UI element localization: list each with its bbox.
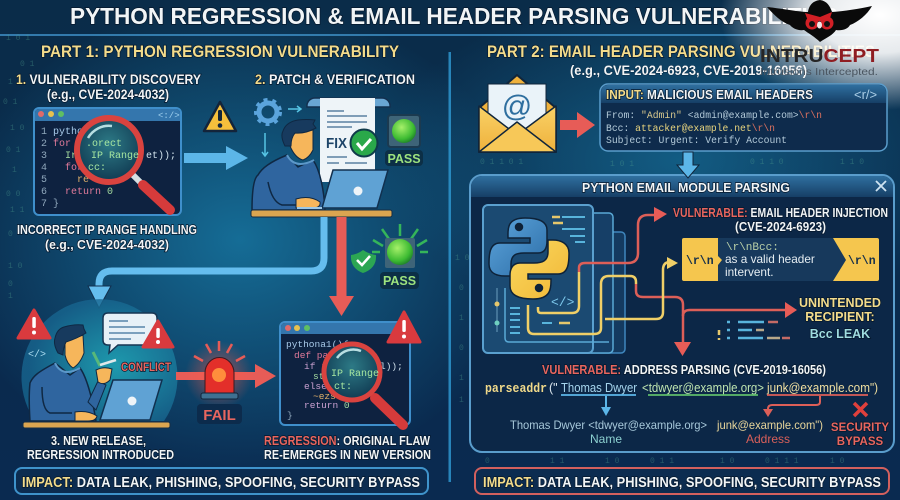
injection payload: [682, 238, 879, 281]
title: PYTHON REGRESSION & EMAIL HEADER PARSING VULNERABILITIES: [70, 3, 838, 29]
caption: incorrect ip range: [17, 223, 197, 252]
step 2 heading: 2. PATCH & VERIFICATION: [255, 72, 415, 87]
code window: discovery: 5 re: [41, 175, 89, 186]
code window: regression: return 0: [304, 400, 350, 411]
unintended recipient: RECIPIENT:: [805, 310, 875, 324]
panel: input headers: <r/>: [854, 87, 877, 102]
code window: regression: pythona1(){: [286, 339, 349, 350]
matrix digits backdrop: 1 0 1: [610, 160, 634, 169]
panel: python email module parsing: [470, 175, 894, 452]
step 1 heading: (e.g., CVE-2024-4032): [47, 87, 169, 102]
matrix digits backdrop: 1 1: [10, 206, 25, 215]
injection payload: as a valid header: [725, 252, 815, 266]
code window: discovery: 3 Ir: [41, 151, 77, 162]
code window: discovery: <:/>: [158, 111, 180, 121]
code window stack: [483, 205, 625, 353]
arrow: to address: [763, 396, 820, 417]
security bypass: BYPASS: [837, 436, 884, 448]
pass light: PASS: [387, 152, 421, 166]
regression caption: RE-EMERGES IN NEW VERSION: [264, 448, 431, 462]
code window: discovery: et));: [146, 150, 176, 162]
parsed name: [510, 418, 707, 446]
code window: discovery: 2 for: [41, 138, 71, 150]
code window: regression: def pat: [294, 350, 334, 361]
address parsing heading: VULNERABLE: ADDRESS PARSING (CVE-2019-16056): [542, 362, 826, 377]
logo: intrucept: Intrusions Intercepted.: [760, 66, 878, 78]
matrix digits backdrop: 1 1: [459, 314, 474, 323]
parseaddr call: <tdwyer@example.org>: [642, 381, 764, 395]
matrix digits backdrop: 0 1 1: [650, 457, 674, 466]
icon: magnifier on code: .orect: [86, 139, 122, 150]
code window: regression: st: [313, 371, 324, 382]
matrix digits backdrop: 0: [459, 284, 464, 293]
parsed address: junk@example.com"): [716, 418, 823, 432]
matrix digits backdrop: 0 1: [3, 98, 18, 107]
laptop: [297, 170, 388, 208]
injection heading: (CVE-2024-6923): [735, 220, 826, 234]
icon: magnifier on regression code: IP Range: [331, 369, 379, 380]
arrow: input to module: [677, 152, 699, 178]
icon: envelope: @: [502, 90, 532, 123]
code window: regression: if r: [304, 361, 327, 372]
code window: discovery: 7 }: [41, 198, 59, 210]
unintended recipient: UNINTENDED: [799, 296, 881, 310]
icon: envelope: [479, 75, 556, 152]
logo backdrop glow: [720, 0, 900, 110]
panel: input headers: Bcc: attacker@example.net\r\n: [606, 123, 775, 135]
icon: magnifier on code: cc:: [88, 163, 106, 174]
parsed address: Address: [746, 432, 790, 446]
matrix digits backdrop: 0 1: [6, 146, 21, 155]
matrix digits backdrop: 1: [12, 166, 17, 175]
speech bubble with warning: [103, 313, 173, 353]
step 3 caption: [27, 434, 174, 462]
code window: discovery: 6 return 0: [41, 187, 113, 198]
warning: left: [18, 310, 50, 338]
matrix digits backdrop: 1 0: [720, 457, 735, 466]
injection payload: intervent.: [725, 265, 774, 279]
desk: [251, 210, 392, 217]
caption: incorrect ip range: INCORRECT IP RANGE HANDLING: [17, 223, 197, 237]
icon: python logo: [489, 218, 569, 299]
arrow: fail to regression: [176, 364, 276, 388]
code window: regression: ~ezs: [313, 391, 336, 402]
laptop: conflict: [100, 380, 162, 420]
code window: regression: [280, 322, 410, 425]
step 3 caption: 3. NEW RELEASE,: [51, 434, 146, 448]
matrix digits backdrop: 1 0: [605, 457, 620, 466]
matrix digits backdrop: 0 1 1 1: [765, 457, 799, 466]
regression caption: REGRESSION: ORIGINAL FLAW: [264, 434, 430, 448]
pass light: [385, 115, 423, 166]
figure: developer conflict: </>: [28, 349, 46, 361]
regression caption: [264, 434, 431, 462]
impact: right: [475, 468, 889, 494]
impact: left: [15, 468, 428, 494]
matrix digits backdrop: 1 0: [10, 124, 25, 133]
matrix digits backdrop: 1: [8, 78, 13, 87]
arrow: discovery to patch: [184, 146, 248, 170]
code window: discovery: [34, 108, 181, 215]
parsed address: [716, 418, 823, 446]
conflict label: CONFLICT: [121, 362, 171, 374]
figure: developer conflict: [28, 325, 116, 421]
module title: PYTHON EMAIL MODULE PARSING: [582, 180, 790, 195]
icon: magnifier on code: [77, 118, 170, 210]
step 1 heading: [16, 72, 201, 102]
icon: shield check: [351, 250, 376, 273]
icon: magnifier on regression code: ct:: [334, 382, 352, 393]
matrix digits backdrop: 0 1 1 0 1: [480, 158, 523, 167]
arrow: patch to regression: [336, 217, 346, 300]
matrix digits backdrop: 1: [8, 292, 13, 301]
parseaddr call: [485, 381, 878, 396]
caption: incorrect ip range: (e.g., CVE-2024-4032): [45, 238, 169, 252]
decorative log lines: [719, 322, 790, 340]
arrow: to name: [601, 396, 611, 416]
matrix digits backdrop: 1 0: [459, 374, 474, 383]
logo: intrucept: INTRU CEPT: [760, 45, 880, 66]
matrix digits backdrop: 1 0 1: [6, 34, 30, 43]
arrow: patch to new release: [99, 217, 324, 292]
icon: gear: [256, 100, 301, 156]
code window: discovery: 1 python: [41, 126, 89, 138]
warning: regression: [388, 312, 420, 342]
flow lines from python: [528, 215, 787, 345]
parseaddr call: Thomas Dwyer: [561, 381, 637, 395]
matrix digits backdrop: 1 0: [455, 254, 470, 263]
second pass light: [372, 224, 428, 289]
code window stack: </>: [551, 295, 575, 310]
parsed name: Thomas Dwyer <tdwyer@example.org>: [510, 418, 707, 432]
injection payload: \r\n: [686, 255, 714, 268]
matrix digits backdrop: 0: [8, 230, 13, 239]
parseaddr call: (": [549, 381, 558, 395]
arrow: envelope to input: [560, 112, 595, 138]
close icon: [876, 181, 886, 191]
security bypass: SECURITY: [831, 422, 889, 434]
parseaddr call: parseaddr: [485, 382, 547, 396]
part 2 cve subheading: (e.g., CVE-2024-6923, CVE-2019-16056): [570, 62, 807, 78]
matrix digits backdrop: 0 0: [6, 190, 21, 199]
parsed name: Name: [590, 432, 622, 446]
injection payload: \r\n: [848, 255, 876, 268]
matrix digits backdrop: 1 0: [8, 262, 23, 271]
panel: input headers: Subject: Urgent: Verify Account: [606, 135, 787, 147]
matrix digits backdrop: 0 1 1 0: [750, 158, 784, 167]
arrow heads: [654, 207, 797, 356]
icon: magnifier on regression code: [324, 344, 403, 425]
security bypass: [831, 403, 889, 448]
code window: regression: }: [287, 410, 293, 421]
matrix digits backdrop: 1: [459, 396, 464, 405]
second pass light: PASS: [383, 274, 416, 288]
fail tag: FAIL: [203, 407, 236, 424]
step 3 spotlight: [22, 299, 178, 421]
fail tag: [197, 404, 242, 424]
matrix digits backdrop: 1 0: [830, 457, 845, 466]
patch document: FIX: [326, 135, 347, 152]
matrix digits backdrop: 1 1 0: [840, 158, 864, 167]
injection payload: \r\nBcc:: [726, 242, 779, 254]
matrix digits backdrop: 0: [459, 344, 464, 353]
code window: regression: else: [304, 381, 327, 392]
matrix digits backdrop: 0: [485, 457, 490, 466]
code window: discovery: 4 for: [41, 162, 83, 174]
logo: intrucept: [760, 0, 880, 78]
siren: [185, 341, 253, 409]
patch document: [307, 98, 390, 182]
panel: input headers: INPUT: MALICIOUS EMAIL HEADERS: [606, 87, 813, 102]
heading: part 1: PART 1: PYTHON REGRESSION VULNERABILITY: [41, 42, 400, 61]
unintended recipient: [799, 296, 881, 341]
code window: regression: l));: [380, 361, 403, 372]
matrix digits backdrop: 0: [8, 280, 13, 289]
desk: conflict: [23, 422, 170, 428]
step 1 heading: 1. VULNERABILITY DISCOVERY: [16, 72, 201, 87]
icon: magnifier on code: IP Range: [91, 151, 139, 162]
icon: warning triangle: [204, 102, 236, 131]
injection heading: [673, 206, 888, 234]
matrix digits backdrop: 1 1: [550, 457, 565, 466]
unintended recipient: Bcc LEAK: [810, 327, 870, 341]
impact: left: IMPACT: DATA LEAK, PHISHING, SPOOFING, SECURITY BYPASS: [22, 474, 420, 491]
matrix digits backdrop: 0 1: [20, 60, 35, 69]
parseaddr call: junk@example.com"): [766, 381, 878, 395]
panel: input headers: From: "Admin" <admin@example.com>\r\n: [606, 110, 822, 122]
step 3 caption: REGRESSION INTRODUCED: [27, 448, 174, 462]
panel: input headers: [600, 84, 887, 151]
figure: developer fixing: [252, 120, 325, 210]
